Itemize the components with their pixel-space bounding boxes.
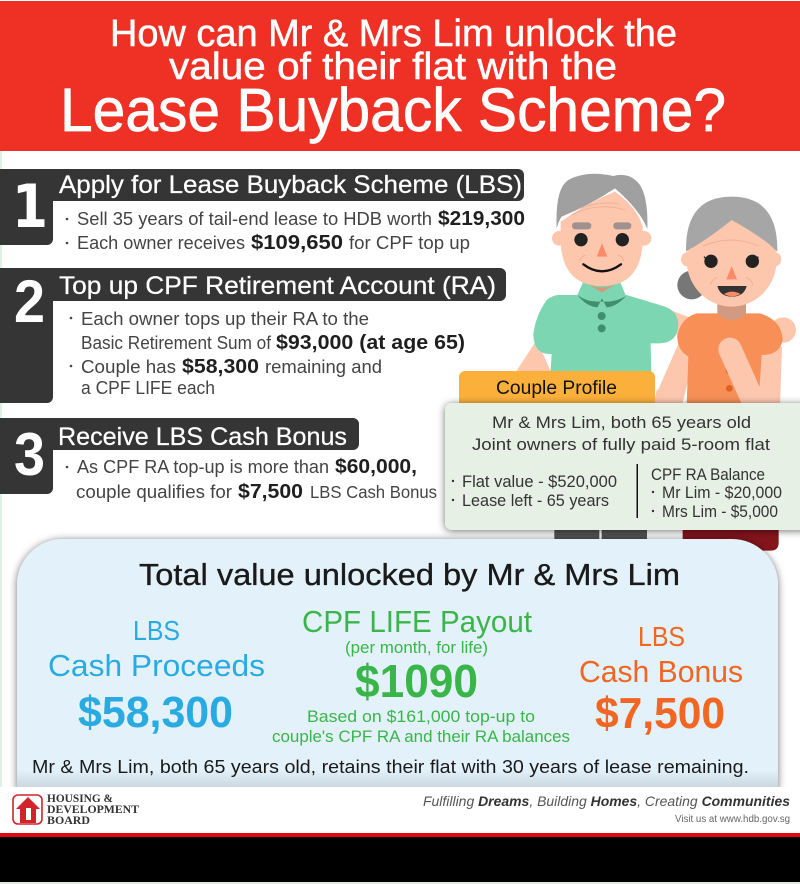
title banner: How can Mr & Mrs Lim unlock the	[110, 13, 677, 55]
step 3: $60,000,	[335, 456, 417, 478]
step 2: Top up CPF Retirement Account (RA)	[59, 272, 496, 300]
couple profile card: Mr & Mrs Lim, both 65 years old	[492, 413, 751, 432]
step 3: $7,500	[238, 481, 303, 503]
CPF LIFE payout: Based on $161,000 top-up to	[307, 707, 535, 726]
step 2: Basic Retirement Sum of	[81, 333, 272, 353]
panel footnote: Mr & Mrs Lim, both 65 years old, retains their flat with 30 years of lease remaining.	[32, 757, 749, 777]
CPF LIFE payout: $1090	[355, 655, 478, 707]
couple profile card: Mr Lim - $20,000	[662, 483, 782, 502]
step 3: couple qualifies for	[76, 481, 232, 502]
profile tab: Couple Profile	[496, 378, 617, 399]
footer	[0, 787, 800, 833]
HDB logo: BOARD	[47, 815, 90, 827]
step 2: remaining and	[265, 356, 382, 377]
legs	[554, 527, 599, 539]
illustration: elderly couple	[515, 174, 796, 551]
couple profile card: CPF RA Balance	[651, 465, 765, 484]
step 2: a CPF LIFE each	[81, 377, 215, 398]
step 2: $93,000 (at age 65)	[276, 332, 465, 354]
couple profile card: Mrs Lim - $5,000	[662, 502, 778, 521]
title banner	[0, 1, 800, 151]
LBS cash proceeds	[48, 615, 265, 737]
step 1: Sell 35 years of tail-end lease to HDB worth	[77, 208, 432, 229]
tagline: Fulfilling Dreams, Building Homes, Creating Communities	[423, 793, 790, 809]
step 1: 1	[12, 172, 48, 242]
HDB logo	[13, 793, 139, 827]
couple profile card: Flat value - $520,000	[462, 472, 617, 491]
couple profile card: Joint owners of fully paid 5-room flat	[472, 435, 770, 454]
HDB logo: DEVELOPMENT	[47, 804, 139, 816]
LBS cash proceeds: $58,300	[78, 688, 233, 737]
LBS cash proceeds: Cash Proceeds	[48, 648, 265, 683]
LBS cash bonus	[579, 621, 743, 738]
step 2: Each owner tops up their RA to the	[81, 308, 369, 329]
LBS cash bonus: $7,500	[595, 689, 725, 738]
step 2: $58,300	[182, 356, 259, 378]
HDB logo: HOUSING &	[47, 793, 113, 805]
step 1: Each owner receives	[77, 232, 245, 253]
LBS cash proceeds: LBS	[133, 615, 180, 646]
man arms	[515, 340, 552, 407]
step 2	[0, 268, 506, 403]
man shirt	[533, 295, 678, 407]
step 1: Apply for Lease Buyback Scheme (LBS)	[59, 171, 522, 199]
CPF LIFE payout	[272, 604, 570, 746]
title banner: value of their flat with the	[169, 46, 617, 88]
woman	[677, 271, 706, 299]
CPF LIFE payout: CPF LIFE Payout	[302, 604, 532, 639]
step 1	[0, 169, 525, 254]
step 1: $109,650	[251, 232, 343, 254]
step 3: Receive LBS Cash Bonus	[58, 423, 347, 451]
step 2: 2	[14, 268, 45, 335]
step 1: $219,300	[438, 208, 525, 230]
title banner: Lease Buyback Scheme?	[60, 76, 726, 144]
step 3: LBS Cash Bonus	[310, 482, 437, 502]
LBS cash bonus: LBS	[638, 621, 685, 652]
panel heading: Total value unlocked by Mr & Mrs Lim	[139, 557, 680, 592]
step 2: Couple has	[81, 356, 176, 377]
couple profile card: Lease left - 65 years	[462, 491, 609, 510]
step 1: for CPF top up	[349, 232, 470, 253]
step 3: As CPF RA top-up is more than	[77, 456, 329, 477]
step 3	[0, 418, 437, 503]
website: Visit us at www.hdb.gov.sg	[675, 813, 790, 825]
CPF LIFE payout: (per month, for life)	[345, 638, 488, 657]
total value panel	[11, 534, 784, 787]
couple profile card	[445, 371, 800, 530]
CPF LIFE payout: couple's CPF RA and their RA balances	[272, 727, 570, 746]
step 3: 3	[14, 421, 45, 488]
man head	[552, 231, 567, 246]
profile tab	[459, 371, 655, 411]
LBS cash bonus: Cash Bonus	[579, 654, 743, 689]
